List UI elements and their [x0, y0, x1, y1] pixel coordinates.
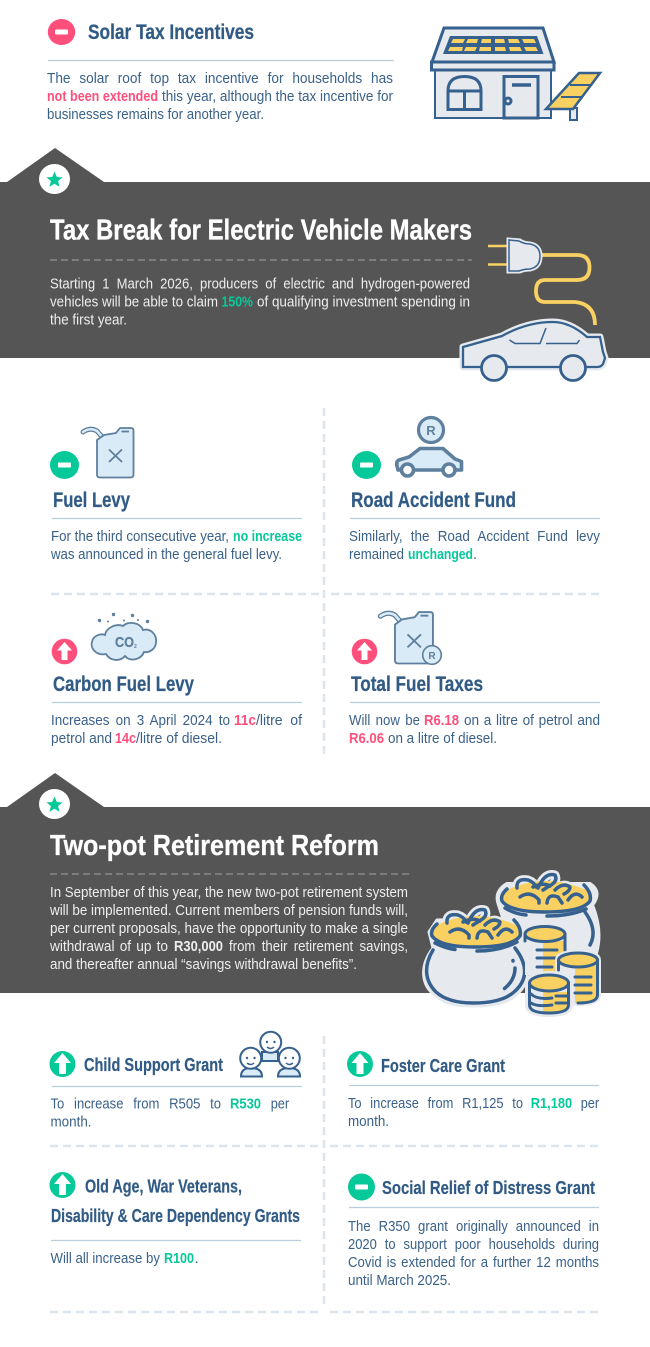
panel: road accident fund [349, 418, 600, 563]
icon: green up arrow [50, 1172, 76, 1198]
text block: child support grant [50, 1096, 289, 1130]
text block: ev description: of qualifying investment spending in [257, 294, 470, 311]
icon: house with solar panels [432, 28, 600, 120]
panel: carbon fuel levy [51, 613, 303, 747]
icon: star badge [39, 164, 70, 194]
text block: total fuel taxes [349, 712, 600, 747]
text block: social relief of distress grant: until March 2025. [348, 1272, 451, 1289]
text block: foster care grant [348, 1095, 599, 1130]
text block: solar description: not been extended [47, 88, 158, 105]
text block: foster care grant: To increase from R1,125 to [348, 1095, 523, 1112]
icon: green minus [50, 451, 79, 479]
icon: car with rand coin [397, 418, 462, 476]
icon: CO2 cloud [92, 613, 156, 660]
text block: ev description [50, 276, 470, 329]
text block: solar description: businesses remains for another year. [47, 106, 264, 123]
text block: two-pot description: withdrawal of up to [49, 938, 168, 955]
heading: carbon fuel levy: Carbon Fuel Levy [53, 673, 194, 696]
text block: total fuel taxes: R6.06 [349, 730, 384, 747]
text block: total fuel taxes: Will now be [349, 712, 420, 729]
text block: carbon fuel levy: 11c [234, 712, 256, 729]
panel: social relief of distress grant [348, 1174, 599, 1289]
text block: foster care grant: R1,180 [531, 1095, 572, 1112]
heading: total fuel taxes: Total Fuel Taxes [351, 673, 483, 696]
heading: social relief of distress grant: Social Relief of Distress Grant [382, 1178, 595, 1198]
icon: green up arrow [347, 1051, 373, 1077]
icon: green minus [352, 451, 381, 479]
text block: total fuel taxes: on a litre of diesel. [388, 730, 497, 747]
text block: two-pot description: and thereafter annual “savings withdrawal benefits”. [50, 956, 357, 973]
heading: tax break: Tax Break for Electric Vehicle Makers [50, 214, 472, 246]
icon: three children [240, 1032, 300, 1076]
text block: old age grants: Will all increase by [50, 1250, 160, 1267]
text block: two-pot description: will be implemented. Current members of pension funds will, [49, 902, 408, 919]
text block: road accident fund: remained [349, 546, 404, 563]
text block: social relief of distress grant: 2020 to support poor households during [348, 1236, 599, 1253]
text block: social relief of distress grant: Covid is extended for a further 12 months [348, 1254, 599, 1271]
icon: pink up arrow [52, 639, 77, 664]
text block: two-pot description: per current proposals, have the opportunity to make a single [50, 920, 408, 937]
text block: road accident fund [349, 528, 600, 563]
icon: plug and cord [488, 239, 595, 325]
icon: pink minus [48, 19, 75, 45]
text block: ev description: Starting 1 March 2026, producers of electric and hydrogen-powered [50, 276, 470, 293]
icon: star badge [39, 789, 70, 819]
heading: foster care grant: Foster Care Grant [381, 1056, 505, 1076]
text block: fuel levy: For the third consecutive year, [51, 528, 229, 545]
text block: two-pot description [49, 884, 408, 973]
icon: jerry can with rand badge [380, 612, 441, 664]
text block: solar description [47, 70, 393, 123]
text block: carbon fuel levy: /litre of diesel. [136, 730, 222, 747]
icon: jerry can [83, 428, 134, 478]
text block: two-pot description: In September of this year, the new two-pot retirement system [50, 884, 408, 901]
panel: child support grant [50, 1032, 302, 1130]
text block: solar description: this year, although the tax incentive for [162, 88, 393, 105]
text block: child support grant: R530 [230, 1096, 261, 1112]
icon: pots of gold and coins [424, 875, 598, 1013]
icon: pink up arrow [352, 639, 377, 664]
icon: electric car [463, 322, 605, 380]
icon: car with rand coin: R [426, 423, 436, 438]
text block: ev description: the first year. [50, 312, 127, 329]
text block: road accident fund: unchanged [408, 546, 473, 563]
heading: old age grants [51, 1177, 300, 1226]
icon: CO2 cloud: CO [115, 634, 134, 651]
text block: fuel levy [50, 528, 302, 563]
text block: fuel levy: was announced in the general fuel levy. [50, 546, 282, 563]
panel: fuel levy [50, 428, 302, 563]
text block: social relief of distress grant: The R350 grant originally announced in [348, 1218, 599, 1235]
icon: front pot [424, 910, 527, 1006]
heading: old age grants: Disability & Care Dependency Grants [51, 1206, 300, 1226]
text block: carbon fuel levy: 14c [115, 730, 136, 747]
text block: road accident fund: . [473, 546, 477, 563]
text block: foster care grant: per [581, 1095, 599, 1112]
panel: old age and disability grants [50, 1172, 301, 1267]
text block: child support grant: To increase from R505 to [50, 1096, 221, 1112]
text block: carbon fuel levy: Increases on 3 April 2024 to [51, 712, 230, 729]
heading: solar tax incentives: Solar Tax Incentives [88, 21, 254, 44]
text block: total fuel taxes: R6.18 [424, 712, 459, 729]
panel: tax break for electric vehicle makers [0, 148, 650, 380]
text block: ev description: vehicles will be able to claim [50, 294, 218, 311]
heading: old age grants: Old Age, War Veterans, [85, 1177, 242, 1197]
panel: total fuel taxes [349, 612, 600, 747]
icon: coin stacks [525, 926, 598, 1013]
heading: two-pot retirement reform: Two-pot Retirement Reform [50, 830, 379, 862]
text block: ev description: 150% [222, 294, 253, 311]
panel: foster care grant [347, 1051, 599, 1130]
text block: fuel levy: no increase [233, 528, 302, 545]
text block: social relief of distress grant [348, 1218, 599, 1289]
icon: CO2 cloud: 2 [134, 644, 137, 650]
icon: back pot [498, 875, 598, 968]
text block: solar description: The solar roof top tax incentive for households has [47, 70, 393, 87]
text block: total fuel taxes: on a litre of petrol and [464, 712, 600, 729]
heading: child support grant: Child Support Grant [84, 1055, 223, 1075]
icon: green minus [348, 1174, 375, 1200]
icon: green up arrow [50, 1051, 76, 1077]
text block: carbon fuel levy [51, 712, 303, 747]
heading: road accident fund: Road Accident Fund [351, 489, 516, 512]
text block: child support grant: per [271, 1096, 289, 1112]
text block: old age grants: . [194, 1250, 199, 1267]
text block: road accident fund: Similarly, the Road Accident Fund levy [349, 528, 600, 545]
icon: jerry can with rand badge: R [428, 651, 436, 662]
text block: two-pot description: from their retirement savings, [229, 938, 408, 955]
heading: fuel levy: Fuel Levy [53, 489, 130, 512]
panel: solar tax incentives [47, 19, 600, 123]
text block: carbon fuel levy: petrol and [51, 730, 112, 747]
text block: carbon fuel levy: /litre of [256, 712, 303, 729]
text block: two-pot description: R30,000 [174, 938, 223, 955]
text block: child support grant: month. [50, 1114, 92, 1130]
text block: foster care grant: month. [348, 1113, 389, 1130]
text block: old age grants: R100 [164, 1250, 194, 1267]
panel: two-pot retirement reform [0, 773, 650, 1013]
